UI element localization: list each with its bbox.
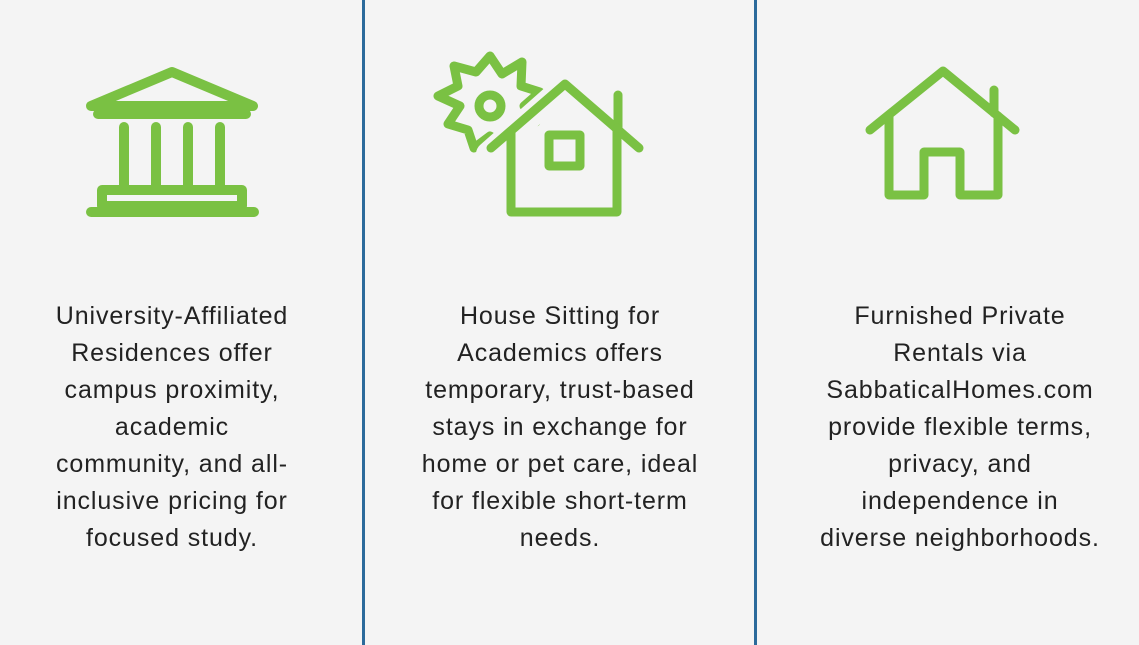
text: furnished rentals: diverse neighborhoods. [820,524,1100,552]
text: university residences: inclusive pricing for [56,487,288,515]
text: furnished rentals [820,302,1100,552]
text: house sitting: temporary, trust-based [425,376,695,404]
text: university residences: community, and all- [56,450,288,478]
text: house sitting [422,302,698,552]
text: furnished rentals: Furnished Private [854,302,1066,330]
icon: house with gear [438,56,639,212]
text: house sitting: Academics offers [457,339,663,367]
text: furnished rentals: independence in [862,487,1058,515]
text: university residences: campus proximity, [65,376,279,404]
text: house sitting: needs. [520,524,600,552]
text: furnished rentals: privacy, and [888,450,1032,478]
text: furnished rentals: provide flexible terms, [828,413,1092,441]
text: furnished rentals: Rentals via [893,339,1027,367]
text: university residences: academic [115,413,229,441]
text: university residences: University-Affiliated [56,302,288,330]
text: house sitting: stays in exchange for [432,413,688,441]
text: university residences: Residences offer [71,339,273,367]
text: house sitting: for flexible short-term [432,487,688,515]
divider left [362,0,365,645]
divider right [754,0,757,645]
text: house sitting: House Sitting for [460,302,660,330]
text: furnished rentals: SabbaticalHomes.com [826,376,1094,404]
icon: university building [91,72,254,212]
text: university residences: focused study. [86,524,258,552]
icon: house [870,71,1015,195]
text: university residences [56,302,288,552]
text: house sitting: home or pet care, ideal [422,450,698,478]
